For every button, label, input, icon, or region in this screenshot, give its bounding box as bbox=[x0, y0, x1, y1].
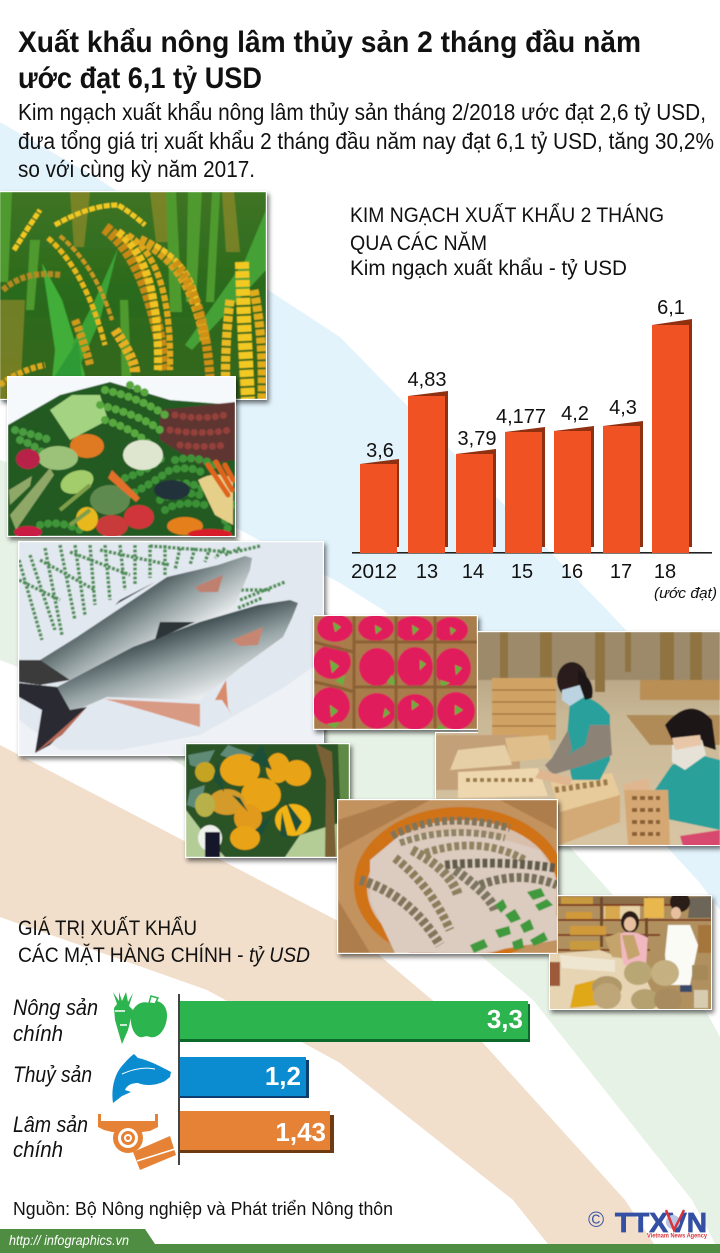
worker 2 bbox=[648, 755, 720, 830]
value labels bbox=[366, 297, 685, 462]
title: Xuất khẩu nông lâm thủy sản 2 tháng đầu năm bbox=[18, 26, 641, 59]
year labels: 18 bbox=[654, 561, 676, 583]
chart heading bbox=[350, 204, 664, 280]
chart heading: Kim ngạch xuất khẩu - tỷ USD bbox=[350, 257, 627, 280]
photo: vegetables bbox=[7, 376, 236, 539]
chart: export turnover by year bbox=[350, 204, 717, 602]
icon: carrot and apple bbox=[113, 992, 167, 1044]
heading: main export items bbox=[18, 917, 310, 967]
year labels: 2012 bbox=[351, 561, 397, 583]
logo: TTXVN: TTXVN bbox=[615, 1207, 707, 1238]
value labels: 6,1 bbox=[657, 297, 685, 319]
category labels bbox=[13, 995, 98, 1162]
category labels: Lâm sản bbox=[13, 1112, 88, 1137]
footer bar bbox=[0, 1229, 720, 1253]
value labels: 4,3 bbox=[609, 397, 637, 419]
bar: seafood 1,2 bbox=[180, 1057, 309, 1098]
photo: shrimp bbox=[337, 799, 566, 963]
year labels: 17 bbox=[610, 561, 632, 583]
category labels: chính bbox=[13, 1137, 63, 1162]
footer bar: http:// infographics.vn bbox=[9, 1233, 129, 1248]
heading: main export items: CÁC MẶT HÀNG CHÍNH - tỷ USD bbox=[18, 944, 310, 967]
bar: agricultural 3,3 bbox=[180, 1001, 530, 1042]
value labels: 4,177 bbox=[496, 406, 546, 428]
chart heading: QUA CÁC NĂM bbox=[350, 232, 487, 255]
year labels: 14 bbox=[462, 561, 484, 583]
bar: forestry 1,43: 1,43 bbox=[275, 1117, 326, 1147]
chart heading: KIM NGẠCH XUẤT KHẨU 2 THÁNG bbox=[350, 204, 664, 227]
value labels: 4,83 bbox=[408, 369, 446, 391]
year labels: 15 bbox=[511, 561, 533, 583]
icon: log and planks bbox=[98, 1114, 176, 1170]
title: ước đạt 6,1 tỷ USD bbox=[18, 62, 262, 95]
photo: tangerines bbox=[185, 743, 350, 858]
bar: forestry 1,43 bbox=[180, 1111, 334, 1153]
category labels: chính bbox=[13, 1021, 63, 1046]
intro text block bbox=[18, 99, 714, 182]
year labels bbox=[351, 561, 717, 602]
year labels: (ước đạt) bbox=[654, 585, 717, 602]
chart: value by main item bbox=[178, 994, 530, 1165]
category labels: Nông sản bbox=[13, 995, 98, 1020]
bar: seafood 1,2: 1,2 bbox=[265, 1061, 301, 1091]
source: Nguồn: Bộ Nông nghiệp và Phát triển Nông thôn bbox=[13, 1199, 393, 1219]
title bbox=[18, 26, 641, 95]
photo: pangasius fish bbox=[18, 541, 324, 756]
value labels: 3,6 bbox=[366, 440, 394, 462]
logo: TTXVN: Vietnam News Agency bbox=[647, 1232, 707, 1240]
photo: dragon fruit bbox=[312, 614, 478, 730]
bar: agricultural 3,3: 3,3 bbox=[487, 1004, 523, 1034]
worker 1 bbox=[566, 697, 610, 780]
category labels: Thuỷ sản bbox=[13, 1062, 92, 1087]
icon: fish bbox=[112, 1054, 171, 1103]
logo: TTXVN: © bbox=[588, 1207, 604, 1232]
bars bbox=[360, 319, 692, 553]
year labels: 16 bbox=[561, 561, 583, 583]
year labels: 13 bbox=[416, 561, 438, 583]
value labels: 3,79 bbox=[458, 428, 496, 450]
intro text block: so với cùng kỳ năm 2017. bbox=[18, 156, 255, 182]
value labels: 4,2 bbox=[561, 403, 589, 425]
photo: wood factory bbox=[435, 631, 720, 846]
photo: rice bbox=[0, 191, 267, 400]
heading: main export items: GIÁ TRỊ XUẤT KHẨU bbox=[18, 917, 197, 940]
photo: handicraft basket shop bbox=[549, 892, 713, 1012]
